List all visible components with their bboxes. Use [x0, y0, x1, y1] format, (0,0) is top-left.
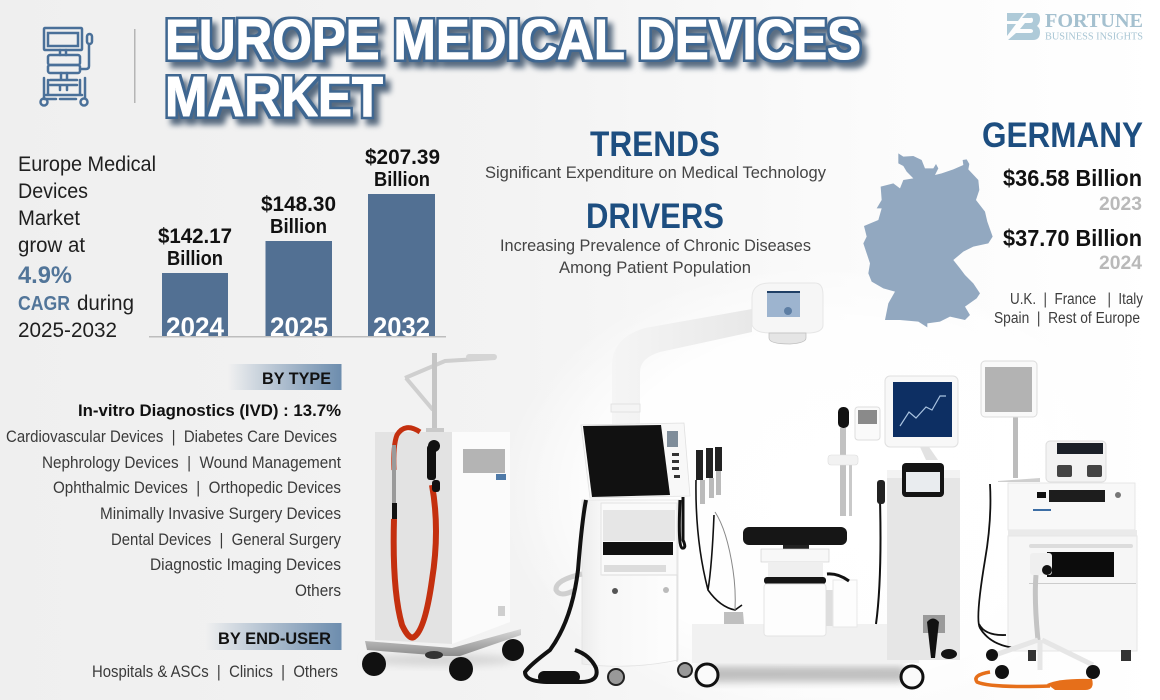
germany values [1003, 165, 1142, 274]
text: CAGR statement: 2025-2032 [18, 319, 117, 342]
bar 2032: Billion [374, 169, 430, 191]
by type list: Ophthalmic Devices | Orthopedic Devices [53, 479, 341, 497]
text: CAGR statement: 4.9% [18, 262, 72, 289]
trends text: Significant Expenditure on Medical Technology [485, 163, 826, 182]
bar 2024: 2024 [166, 312, 224, 342]
by type list: Diagnostic Imaging Devices [150, 556, 341, 574]
by type list: In-vitro Diagnostics (IVD) : 13.7% [78, 401, 341, 420]
trends heading: TRENDS [590, 125, 720, 164]
equipment: right cart with display and cuff [976, 361, 1137, 690]
by end-user heading: BY END-USER [218, 630, 331, 648]
drivers text [500, 236, 811, 277]
drivers text: Increasing Prevalence of Chronic Diseases [500, 236, 811, 255]
germany values: $36.58 Billion [1003, 165, 1142, 191]
text: CAGR statement: Europe Medical [18, 153, 156, 176]
bar 2032: 2032 [373, 312, 430, 342]
equipment: monitor cart [525, 423, 692, 685]
bar 2025: $148.30 [261, 193, 336, 216]
bar 2024: $142.17 [158, 225, 232, 248]
title: EUROPE MEDICAL DEVICES [165, 8, 861, 72]
equipment: blue monitor tower [876, 376, 960, 660]
map: Germany [863, 153, 993, 327]
by end-user heading [205, 623, 342, 650]
equipment: wall sensor and small display [828, 407, 880, 516]
by type list: Others [295, 582, 341, 600]
by type list: Dental Devices | General Surgery [111, 531, 342, 549]
text: CAGR statement: grow at [18, 234, 85, 257]
germany values: 2023 [1099, 194, 1142, 215]
bar 2024: Billion [167, 248, 223, 270]
drivers text: Among Patient Population [559, 258, 751, 277]
by end-user list: Hospitals & ASCs | Clinics | Others [92, 663, 338, 681]
other regions: Spain | Rest of Europe [994, 310, 1140, 327]
text: CAGR statement [18, 153, 156, 342]
other regions [994, 291, 1143, 327]
equipment: treatment table [692, 527, 923, 688]
equipment: scope arm [611, 283, 823, 424]
by type list [6, 401, 342, 600]
text: CAGR statement: Market [18, 207, 80, 230]
text: CAGR statement: CAGR [18, 293, 70, 315]
divider [134, 29, 136, 103]
germany values: 2024 [1099, 253, 1142, 274]
bar chart: market size [149, 146, 446, 342]
bar 2025: 2025 [270, 312, 328, 342]
title: MARKET [165, 65, 383, 129]
bar 2024 [158, 225, 232, 342]
logo: Fortune Business Insights: BUSINESS INSIGHTS [1045, 32, 1143, 42]
equipment: probes on cables [696, 447, 744, 624]
text: CAGR statement: during [77, 292, 134, 315]
bar 2025: Billion [270, 216, 327, 238]
icon: medical cart [40, 28, 92, 106]
by type list: Minimally Invasive Surgery Devices [100, 505, 341, 523]
by type list: Cardiovascular Devices | Diabetes Care Devices [6, 428, 337, 446]
germany heading: GERMANY [982, 116, 1143, 155]
title [165, 8, 861, 129]
by type heading [228, 364, 342, 390]
equipment: red hose cabinet [362, 353, 524, 681]
bar 2032 [365, 146, 440, 342]
logo: Fortune Business Insights [1007, 10, 1143, 42]
bar 2032: $207.39 [365, 146, 440, 169]
logo: Fortune Business Insights: FORTUNE [1045, 10, 1143, 32]
by type list: Nephrology Devices | Wound Management [42, 454, 341, 472]
bar 2025 [261, 193, 336, 342]
by type heading: BY TYPE [262, 370, 331, 388]
other regions: U.K. | France | Italy [1010, 291, 1143, 308]
germany values: $37.70 Billion [1003, 225, 1142, 251]
drivers heading: DRIVERS [586, 197, 724, 236]
text: CAGR statement: Devices [18, 180, 88, 203]
